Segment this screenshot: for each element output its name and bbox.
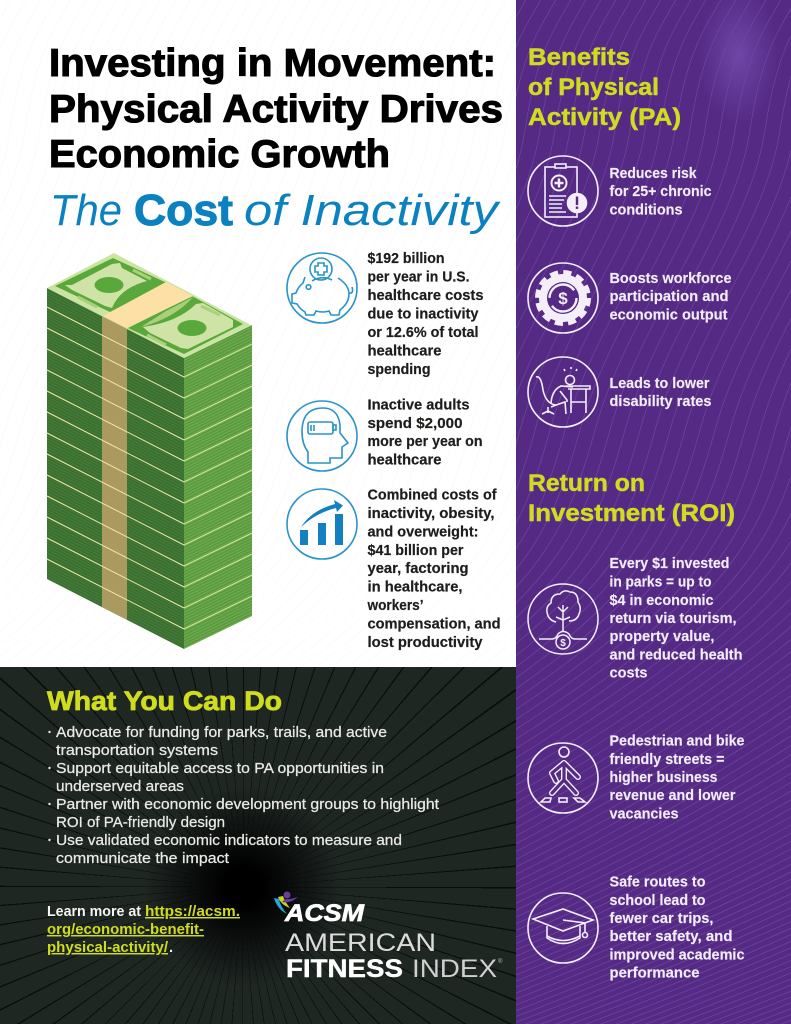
text: combined costs: lost productivity bbox=[368, 635, 483, 651]
text: safe routes bbox=[610, 874, 744, 982]
text: healthcare costs: healthcare bbox=[368, 344, 442, 360]
text: safe routes: Safe routes to bbox=[610, 874, 706, 890]
list: actions: communicate the impact bbox=[56, 851, 229, 867]
icon: clipboard with alert bbox=[528, 156, 598, 226]
heading: return on investment: Return on bbox=[528, 470, 645, 497]
icon: slumped worker at desk bbox=[528, 357, 598, 427]
text: healthcare costs: or 12.6% of total bbox=[368, 325, 478, 341]
icon: gear with dollar bbox=[528, 263, 598, 333]
title: Physical Activity Drives bbox=[49, 88, 503, 131]
subtitle: the cost of inactivity bbox=[50, 186, 501, 235]
text: pedestrian streets bbox=[610, 734, 744, 822]
heading: return on investment bbox=[528, 470, 735, 527]
list: actions: Advocate for funding for parks, trails, and active bbox=[56, 725, 387, 741]
heading: benefits of physical activity: of Physical bbox=[528, 74, 659, 101]
text: combined costs bbox=[367, 488, 500, 651]
text: inactive adults: healthcare bbox=[368, 452, 442, 468]
text: learn more link: physical-activity/ bbox=[47, 940, 168, 956]
logo: ACSM American Fitness Index: ACSM bbox=[284, 900, 365, 927]
heading: return on investment: Investment (ROI) bbox=[528, 500, 735, 527]
text: learn more link: org/economic-benefit- bbox=[47, 922, 204, 938]
list: actions: Support equitable access to PA opportunities in bbox=[56, 761, 384, 777]
text: healthcare costs: $192 billion bbox=[368, 251, 445, 267]
title: Investing in Movement: bbox=[49, 42, 496, 85]
subtitle: the cost of inactivity: of Inactivity bbox=[244, 186, 501, 235]
heading: benefits of physical activity: Benefits bbox=[528, 44, 630, 71]
title bbox=[49, 42, 503, 176]
text: parks return: property value, bbox=[610, 629, 714, 645]
heading: benefits of physical activity bbox=[528, 44, 681, 131]
logo: ACSM American Fitness Index: ® bbox=[498, 958, 503, 965]
text: disability rates: disability rates bbox=[610, 394, 712, 410]
logo: ACSM American Fitness Index bbox=[274, 892, 503, 983]
subtitle: the cost of inactivity: Cost bbox=[134, 186, 233, 235]
text: learn more link: . bbox=[169, 940, 173, 956]
icon: head with low battery bbox=[287, 401, 357, 471]
logo: ACSM American Fitness Index: AMERICAN bbox=[285, 929, 436, 957]
text: combined costs: workers’ bbox=[367, 598, 424, 614]
text: healthcare costs: spending bbox=[368, 362, 430, 378]
icon: tree with dollar coin bbox=[528, 584, 598, 654]
title: Economic Growth bbox=[49, 133, 390, 176]
text: parks return: Every $1 invested bbox=[610, 556, 730, 572]
icon: pedestrian on crosswalk bbox=[528, 743, 598, 813]
text: learn more link: https://acsm. bbox=[145, 904, 240, 920]
logo: ACSM American Fitness Index: INDEX bbox=[412, 955, 497, 983]
text: healthcare costs: due to inactivity bbox=[368, 306, 479, 322]
list: actions: transportation systems bbox=[56, 743, 218, 759]
text: combined costs: $41 billion per bbox=[368, 543, 464, 559]
text: chronic conditions: conditions bbox=[610, 202, 682, 218]
logo: ACSM American Fitness Index: FITNESS bbox=[286, 955, 403, 983]
illustration: stack of money bbox=[47, 253, 252, 649]
list: actions: Use validated economic indicators to measure and bbox=[56, 833, 402, 849]
text: pedestrian streets: vacancies bbox=[610, 806, 678, 822]
text: healthcare costs: per year in U.S. bbox=[368, 270, 470, 286]
panel: purple benefits column bbox=[516, 0, 791, 1024]
text: pedestrian streets: higher business bbox=[610, 770, 718, 786]
list: actions: ROI of PA-friendly design bbox=[56, 815, 225, 831]
panel: what you can do background bbox=[0, 667, 516, 1024]
text: combined costs: year, factoring bbox=[368, 561, 468, 577]
icon: rising bar chart bbox=[287, 489, 357, 559]
text: combined costs: inactivity, obesity, bbox=[368, 506, 494, 522]
text: disability rates bbox=[610, 376, 712, 410]
text: chronic conditions: for 25+ chronic bbox=[610, 184, 712, 200]
text: inactive adults: spend $2,000 bbox=[368, 416, 462, 432]
text: safe routes: school lead to bbox=[610, 893, 706, 909]
text: combined costs: Combined costs of bbox=[368, 488, 497, 504]
text: parks return bbox=[610, 556, 743, 682]
text: safe routes: improved academic bbox=[610, 948, 744, 964]
text: inactive adults: Inactive adults bbox=[368, 398, 470, 414]
text: healthcare costs bbox=[368, 251, 484, 378]
text: parks return: costs bbox=[610, 666, 648, 682]
heading: benefits of physical activity: Activity (PA) bbox=[528, 104, 681, 131]
text: learn more link bbox=[47, 904, 240, 956]
text: pedestrian streets: Pedestrian and bike bbox=[610, 734, 744, 750]
icon: graduation cap bbox=[528, 893, 598, 963]
subtitle: the cost of inactivity: The bbox=[50, 186, 122, 235]
text: chronic conditions: Reduces risk bbox=[610, 166, 697, 182]
text: parks return: $4 in economic bbox=[610, 593, 714, 609]
icon: tree with dollar coin: $ bbox=[560, 638, 566, 649]
text: safe routes: performance bbox=[610, 966, 700, 982]
text: parks return: in parks = up to bbox=[610, 574, 712, 590]
text: healthcare costs: healthcare costs bbox=[368, 288, 484, 304]
text: workforce participation bbox=[610, 271, 732, 324]
text: chronic conditions bbox=[610, 166, 712, 218]
list: actions: underserved areas bbox=[56, 779, 184, 795]
heading: what you can do: What You Can Do bbox=[47, 686, 282, 716]
text: learn more link: Learn more at bbox=[47, 904, 141, 920]
list: actions: Partner with economic development groups to highlight bbox=[56, 797, 439, 813]
text: safe routes: better safety, and bbox=[610, 929, 732, 945]
list: actions bbox=[48, 725, 439, 867]
text: pedestrian streets: revenue and lower bbox=[610, 788, 736, 804]
text: combined costs: and overweight: bbox=[368, 524, 478, 540]
text: pedestrian streets: friendly streets = bbox=[610, 752, 724, 768]
text: workforce participation: participation and bbox=[610, 289, 728, 305]
text: combined costs: in healthcare, bbox=[368, 580, 462, 596]
icon: gear with dollar: $ bbox=[558, 289, 568, 308]
text: inactive adults: more per year on bbox=[368, 434, 483, 450]
text: workforce participation: Boosts workforce bbox=[610, 271, 732, 287]
text: disability rates: Leads to lower bbox=[610, 376, 710, 392]
text: safe routes: fewer car trips, bbox=[610, 911, 714, 927]
icon: piggy bank bbox=[287, 253, 357, 323]
text: workforce participation: economic output bbox=[610, 308, 728, 324]
text: parks return: and reduced health bbox=[610, 648, 743, 664]
text: combined costs: compensation, and bbox=[368, 616, 500, 632]
text: inactive adults bbox=[368, 398, 483, 468]
text: parks return: return via tourism, bbox=[610, 611, 736, 627]
